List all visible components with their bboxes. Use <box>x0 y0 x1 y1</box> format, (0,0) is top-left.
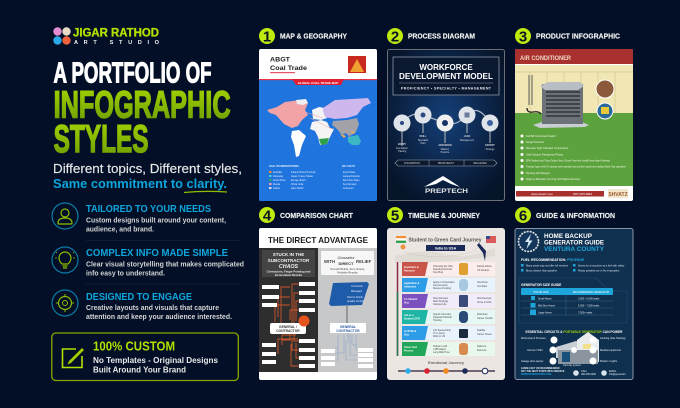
generator size table: RECOMMENDED GENERATOR <box>573 291 609 294</box>
card: workforce development model: DEVELOPMENT MODEL <box>399 72 493 81</box>
card: home backup generator guide: VENTURA COUNTY <box>544 247 604 253</box>
generator size table: Large Home <box>538 312 552 314</box>
map legend: India & China (Thermal) <box>291 171 316 174</box>
left side: chaos: GENERAL / <box>279 325 297 329</box>
map legend: COAL TRANSPORTATIONS <box>269 165 299 168</box>
map legend: Indonesia <box>273 176 284 178</box>
feature: complex info made simple: info easy to understand. <box>86 268 165 278</box>
timeline rows: Choosing the USA <box>433 265 453 268</box>
detail circles <box>596 80 614 119</box>
essential circuits: Modem / Lights <box>600 360 618 363</box>
card: workforce development model: PROFICIENCY • SPECIALTY • MANAGEMENT <box>401 86 492 90</box>
process nodes: LEAD <box>464 135 471 138</box>
card: student to green card journey: Student to Green Card Journey <box>408 238 482 244</box>
number badge 5: 5 <box>391 207 399 224</box>
timeline rows: Application & <box>404 282 420 285</box>
timeline rows: Visa Docs <box>477 281 489 284</box>
timeline rows: Visa <box>404 302 410 304</box>
map legend: Asia, Pacific <box>291 187 304 190</box>
progress arrow: PROFICIENCY <box>438 162 455 165</box>
timeline rows: Visa <box>404 334 410 336</box>
card: coal trade map <box>259 49 377 201</box>
map legend: Japan, Korea, Taiwan <box>291 175 314 178</box>
timeline rows: Inspiration & <box>404 266 419 269</box>
timeline rows: Get Accepted <box>433 284 448 287</box>
timeline rows: Apply to Universities <box>433 281 455 284</box>
number badge 1 <box>259 28 275 45</box>
card: home backup generator guide: HOME BACKUP <box>544 234 592 240</box>
left side: chaos: CONTRACTOR <box>276 329 300 333</box>
essential circuits: Security system <box>563 364 581 367</box>
timeline rows: Optional Practical <box>433 316 452 319</box>
generator size table: Small Home <box>538 298 552 300</box>
right side: relief: Reliable Results <box>337 270 358 274</box>
callout: 100% custom: No Templates - Original Designs <box>93 355 218 365</box>
emotional journey: Emotional Journey <box>428 360 465 365</box>
tagline: Different topics, Different styles, <box>53 162 242 176</box>
timeline rows: Training <box>433 319 442 322</box>
left side: chaos <box>259 248 318 372</box>
process nodes: Practice <box>441 151 450 154</box>
number badge 2: 2 <box>391 28 399 45</box>
card: coal trade map: ABGT <box>270 56 290 64</box>
left side: chaos: SUBCONTRACTOR <box>268 258 310 263</box>
fuel recommendation: Stores for a long time as a fuel with safety <box>578 264 625 267</box>
card: coal trade map: Coal Trade <box>270 65 307 72</box>
right side: relief: DIRECT <box>339 261 354 266</box>
logo: Preptech: PREPTECH <box>425 188 468 195</box>
footer contact: GUIDE FACT OR RECOMMENDED <box>521 367 560 370</box>
left side: chaos: STUCK IN THE <box>273 252 304 257</box>
panel 1: map and geography: MAP & GEOGRAPHY <box>280 34 347 40</box>
right side: relief: CONTRACTOR <box>336 329 360 333</box>
timeline rows: Test Date <box>477 285 488 288</box>
feature: designed to engage: DESIGNED TO ENGAGE <box>86 291 192 303</box>
footer contact: EMAIL <box>609 370 617 373</box>
timeline rows: Selecting Schools <box>433 268 453 271</box>
panel 5: timeline and journey <box>387 207 505 380</box>
footer bar: (567) 876-9801 <box>573 192 593 196</box>
map legend: Australia <box>273 171 283 174</box>
map legend: Consumer <box>343 187 354 190</box>
timeline rows: H-1B Work <box>404 330 417 333</box>
map legend: Europe, Brazil <box>291 179 306 182</box>
card: air conditioner <box>515 49 633 201</box>
panel 6: guide and information <box>515 207 633 380</box>
title <box>54 58 231 161</box>
timeline rows: Stability <box>477 329 486 332</box>
process nodes: Training <box>398 150 407 153</box>
essential circuits: Garage door opener <box>521 360 544 363</box>
fuel recommendation <box>521 258 625 272</box>
footer contact: info@generator <box>609 373 626 376</box>
generator size table: HOUSE SIZE <box>533 291 549 294</box>
title: STYLES <box>54 118 149 161</box>
card: workforce development model <box>388 50 504 200</box>
footer contact: WWW.GENERATORS.COM <box>521 373 551 376</box>
timeline rows: Arrive in USA <box>477 301 492 304</box>
timeline rows: Start Studying <box>433 300 449 303</box>
card: workforce development model: WORKFORCE <box>419 63 473 72</box>
feature: complex info made simple: COMPLEX INFO MADE SIMPLE <box>86 247 228 259</box>
card: student to green card journey: India to USA <box>435 246 457 250</box>
emotional journey <box>398 360 495 374</box>
timeline rows: F-1 Student <box>404 298 417 301</box>
feature list: Surge Protector <box>526 140 544 144</box>
footer bar <box>516 189 628 198</box>
left side: chaos: CHAOS <box>279 264 299 270</box>
panel 3: product infographic: PRODUCT INFOGRAPHIC <box>536 34 620 40</box>
right side: relief: Start to Finish <box>347 295 364 299</box>
callout: 100% custom: 100% CUSTOM <box>93 340 175 354</box>
panel 5: timeline and journey: TIMELINE & JOURNEY <box>408 213 480 220</box>
map legend <box>269 165 360 190</box>
panel 4: comparison chart: COMPARISON CHART <box>280 213 354 220</box>
generator size table: Mid-Size Home <box>538 304 556 308</box>
timeline rows: Visa Success <box>477 297 492 300</box>
title: INFOGRAPHIC <box>54 84 231 126</box>
timeline rows: Receive Funding <box>433 287 452 290</box>
callout: 100% custom <box>52 333 238 380</box>
timeline rows: Visa Interview <box>433 297 448 300</box>
process nodes: Strategy <box>486 148 495 151</box>
map legend: Russia <box>273 184 281 186</box>
right side: relief: RELIEF <box>356 259 372 264</box>
fuel recommendation: Ready portable use in fire evacuation <box>578 269 620 272</box>
logo: Jigar Rathod Art Studio: ART STUDIO <box>74 40 160 46</box>
panel 1: map and geography <box>259 28 377 201</box>
feature list: Maintain Tight Checked Connections <box>526 146 569 150</box>
feature: tailored to your needs: audience, and brand. <box>86 225 154 234</box>
timeline rows <box>398 262 495 356</box>
map legend: South Africa <box>273 179 286 182</box>
feature: designed to engage <box>52 290 232 321</box>
essential circuits: Internet / WiFi <box>527 349 543 352</box>
footer bar: SHVATZ <box>608 192 628 198</box>
card: the direct advantage <box>259 228 377 380</box>
map legend: Electricity Share <box>343 179 360 182</box>
progress arrow <box>395 160 497 166</box>
map legend: Global <box>273 188 280 190</box>
card: home backup generator guide: GENERATOR GUIDE <box>544 240 604 246</box>
feature: tailored to your needs <box>52 203 226 234</box>
right side: relief: GENERAL <box>340 325 356 329</box>
process nodes: ENTRY <box>398 143 406 146</box>
process nodes: Path <box>421 142 426 145</box>
panel 2: process diagram: PROCESS DIAGRAM <box>408 34 475 40</box>
process nodes: Foundation <box>396 147 409 150</box>
fuel recommendation: Burns cleaner than gasoline <box>526 269 558 272</box>
panel 3: product infographic <box>515 28 633 201</box>
card: the direct advantage: THE DIRECT ADVANTAGE <box>268 235 368 245</box>
right side: relief: Gonzalez <box>338 255 354 260</box>
timeline rows: Work in US <box>433 335 445 338</box>
process nodes: Mastery <box>441 148 450 151</box>
number badge 1: 1 <box>263 28 271 45</box>
feature: tailored to your needs: TAILORED TO YOUR NEEDS <box>86 203 211 215</box>
left side: chaos: Contractors, Finger Pointing and <box>267 270 311 274</box>
tagline: Same commitment to clarity. <box>53 177 227 191</box>
timeline rows: Test Prep <box>433 271 444 274</box>
timeline rows: Attend University <box>433 313 452 316</box>
number badge 2 <box>387 28 403 45</box>
left side: chaos: Inconsistent Results <box>275 273 303 277</box>
feature list: Full Bill Overcrowd Switch <box>526 134 557 138</box>
map legend: Key Demand <box>343 184 357 186</box>
number badge 4 <box>259 207 275 224</box>
logo: Jigar Rathod Art Studio <box>53 27 160 46</box>
timeline rows: H-1 Lottery <box>433 332 446 335</box>
footer bar: www.shvartz.com <box>531 192 553 196</box>
timeline rows: New Life <box>477 349 487 352</box>
generator size table: 7,500+ watts <box>578 312 593 314</box>
feature list: Routing with Manger <box>526 171 550 175</box>
right side: relief: Quality Control <box>347 299 365 303</box>
generator size table <box>519 278 627 323</box>
number badge 5 <box>387 207 403 224</box>
progress arrow: FOUNDATION <box>404 162 420 165</box>
card: air conditioner: AIR CONDITIONER <box>520 55 571 62</box>
timeline rows: Patience <box>477 345 487 348</box>
tagline <box>53 162 242 192</box>
right side: relief: Contractor <box>351 284 363 288</box>
panel 6: guide and information: GUIDE & INFORMATION <box>536 213 615 220</box>
timeline rows: Green Card <box>404 346 418 349</box>
footer contact: 000-000-0000 <box>581 373 597 376</box>
progress arrow: INFLUENCE <box>473 162 487 165</box>
map legend: Largest Exporter <box>343 175 360 178</box>
callout: 100% custom: Built Around Your Brand <box>93 364 186 374</box>
feature list: Ways to Maintain Your Fig with Digital Services <box>526 177 581 181</box>
number badge 4: 4 <box>263 207 272 224</box>
process nodes: SKILL <box>420 135 427 138</box>
icon: person <box>52 203 78 229</box>
footer contact: SET THE NEXT STEPS WITH SERVICE <box>521 370 565 373</box>
right side: relief: WITH <box>324 259 335 264</box>
right side: relief <box>318 248 377 372</box>
card: coal trade map: GLOBAL COAL TRADE MAP <box>298 81 338 85</box>
essential circuits: Well pump & Pressure <box>521 337 546 340</box>
timeline rows: Career Growth <box>477 317 493 320</box>
timeline rows: Family Advice <box>477 265 492 268</box>
feature: designed to engage: attention and keep your audience interested. <box>86 312 232 321</box>
number badge 6 <box>515 207 531 224</box>
process nodes: EXPERT <box>485 144 495 147</box>
timeline rows: Admission <box>404 286 417 288</box>
timeline rows: Campus Life <box>433 303 447 306</box>
panel 4: comparison chart <box>259 207 377 380</box>
feature list: Tracing Vapor with To replace and maintain and confirm repair and replace Best Tips operation <box>526 164 627 168</box>
footer contact: CALL <box>581 370 588 373</box>
right side: relief: Smooth Builds, Zero Stress, <box>330 267 365 271</box>
icon: pencil on square <box>62 348 84 368</box>
timeline rows: I-485 Adjust <box>433 348 446 351</box>
map legend: KEY FACTS <box>342 165 355 168</box>
fuel recommendation: Many areas may not offer full services <box>526 264 569 267</box>
feature list: Seal Outdoor Refrigerant Piping <box>526 152 563 156</box>
icon: light bulb <box>52 247 78 273</box>
timeline rows: Research <box>404 270 415 272</box>
essential circuits: ESSENTIAL CIRCUITS & PORTABLE GENERATOR CAN POWER <box>526 330 623 334</box>
process nodes <box>394 106 498 154</box>
process nodes: ADVANCED <box>438 144 452 147</box>
process nodes: Management <box>460 139 474 142</box>
timeline rows: Petition I-140 <box>433 345 448 348</box>
feature: complex info made simple <box>52 247 244 278</box>
feature: complex info made simple: Clear visual storytelling that makes complicated <box>86 260 244 268</box>
essential circuits <box>521 330 626 367</box>
fuel recommendation: FUEL RECOMMENDATION: PROPANE <box>521 258 585 262</box>
timeline rows: Career Stress <box>477 333 493 336</box>
map legend: Import Data <box>343 171 356 174</box>
logo: Jigar Rathod Art Studio: JIGAR RATHOD <box>73 28 159 40</box>
icon: lightning badge <box>518 232 538 252</box>
process nodes: Specialist <box>418 139 428 142</box>
AC unit <box>527 75 589 128</box>
card: student to green card journey <box>387 228 505 380</box>
feature list <box>520 134 627 181</box>
footer contact <box>521 367 626 376</box>
feature: tailored to your needs: Custom designs built around your content, <box>86 216 226 225</box>
number badge 3: 3 <box>519 28 527 45</box>
timeline rows: Life as a <box>404 314 414 317</box>
number badge 6: 6 <box>519 207 527 224</box>
card: home backup generator guide <box>515 228 633 380</box>
world map <box>267 98 371 157</box>
feature list: EPA Sealed and Tube Option Next Clover Free the Install Keep Aged Infested <box>526 158 611 162</box>
timeline rows: US Dreams <box>477 269 490 272</box>
generator size table: 5,000 - 7,500 watts <box>578 304 600 308</box>
timeline rows: Process <box>404 350 414 352</box>
map legend: China, India <box>291 184 304 186</box>
timeline rows: Work Exp <box>477 313 488 316</box>
icon: target <box>52 290 78 316</box>
generator size table: 3,000 - 5,000 watts <box>578 298 600 300</box>
title: A PORTFOLIO OF <box>54 58 212 90</box>
essential circuits: Medical equipment <box>600 349 621 352</box>
generator size table: GENERATOR SIZE GUIDE <box>521 283 562 287</box>
feature: designed to engage: Creative layouts and visuals that capture <box>86 303 219 312</box>
number badge 3 <box>515 28 531 45</box>
right side: relief: Managed <box>351 289 362 293</box>
panel 2: process diagram <box>387 28 504 200</box>
timeline rows: Student (OPT) <box>404 318 420 320</box>
logo: Preptech <box>424 176 468 195</box>
timeline rows: Long Wait Time <box>433 351 450 354</box>
essential circuits: Cooking (Gas Heating) <box>600 337 626 340</box>
timeline rows: Job Sponsorship <box>433 329 451 332</box>
